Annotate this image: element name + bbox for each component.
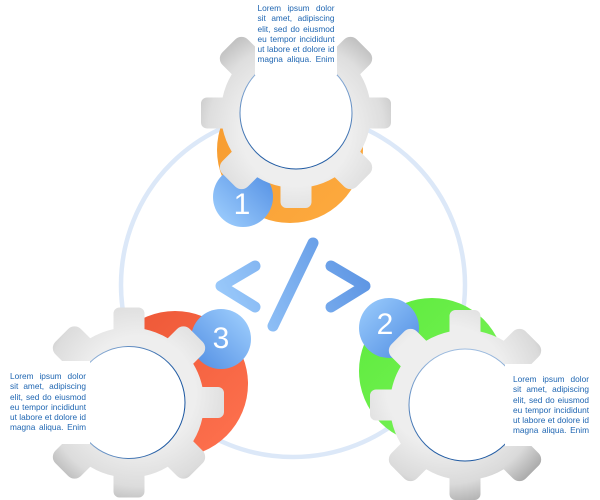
text block 3: sit amet, adipiscing: [10, 381, 86, 391]
diagram: [52, 36, 542, 500]
text block 3: ut labore et dolore id: [10, 412, 86, 422]
text block 3: eu tempor incididunt: [10, 402, 86, 412]
text block 2: sit amet, adipiscing: [513, 384, 589, 394]
text block 2: ut labore et dolore id: [513, 415, 589, 425]
text block 1: sit amet, adipiscing: [258, 13, 334, 23]
coloured disc 1: orange: [217, 77, 363, 223]
text block 1: magna aliqua. Enim: [258, 54, 334, 64]
gear 1: [201, 36, 391, 208]
text block 1: [254, 0, 336, 75]
text block 2: elit, sed do eiusmod: [513, 394, 589, 404]
badge circle 3: [191, 309, 251, 369]
text block 1: eu tempor incididunt: [258, 34, 334, 44]
text block 3: Lorem ipsum dolor: [10, 371, 86, 381]
text block 3: [0, 361, 90, 444]
text block 1: Lorem ipsum dolor: [258, 3, 334, 13]
text block 2: Lorem ipsum dolor: [513, 374, 589, 384]
coloured disc 2: green: [359, 298, 505, 444]
text block 3: elit, sed do eiusmod: [10, 392, 86, 402]
gear 2: [370, 310, 542, 500]
text block 1: elit, sed do eiusmod: [258, 24, 334, 34]
number 3: 3: [213, 322, 229, 355]
badge circle 1: [213, 167, 273, 227]
number 2: 2: [377, 308, 393, 341]
coloured disc 3: red: [102, 311, 248, 457]
text block 2: eu tempor incididunt: [513, 405, 589, 415]
large connecting ring: [121, 113, 465, 457]
text block 3: magna aliqua. Enim: [10, 422, 86, 432]
text block 2: [505, 364, 600, 446]
text block 1: ut labore et dolore id: [258, 44, 334, 54]
gear 3: [52, 308, 224, 498]
badge circle 2: [359, 298, 419, 358]
text block 2: magna aliqua. Enim: [513, 425, 589, 435]
code icon: [221, 243, 365, 326]
number 1: 1: [234, 188, 250, 221]
